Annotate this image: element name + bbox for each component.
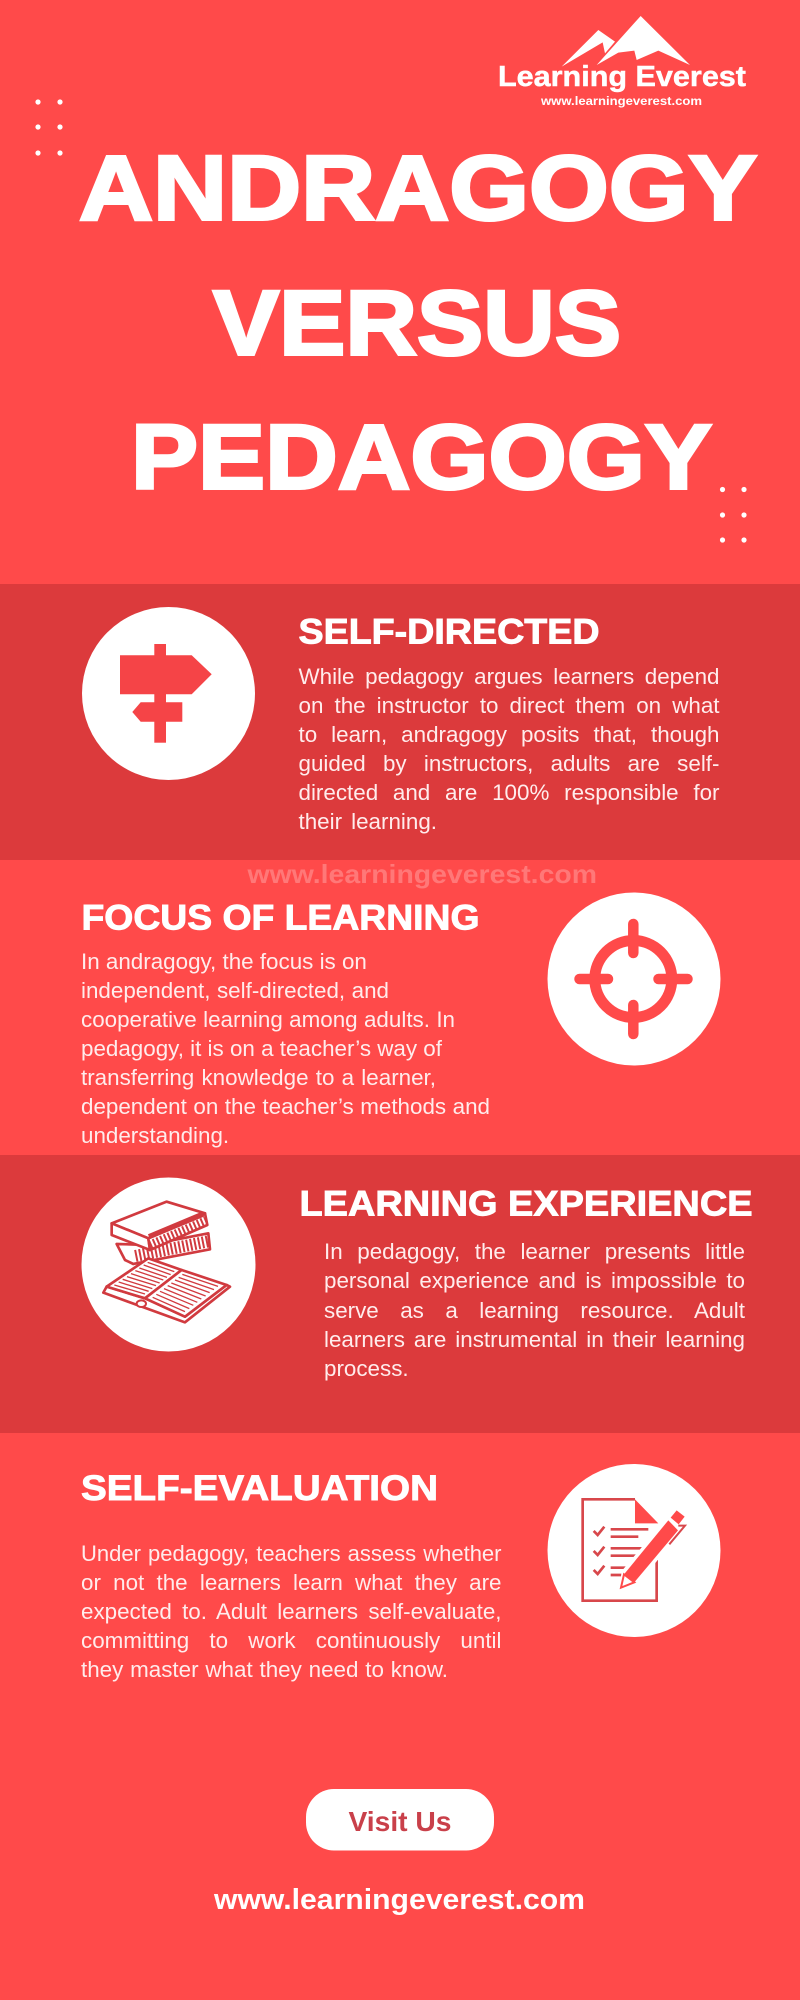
heading: self-directed: SELF-DIRECTED <box>298 612 600 652</box>
heading: focus of learning: FOCUS OF LEARNING <box>82 898 480 938</box>
text: self-directed body: While pedagogy argues learners depend <box>298 664 720 689</box>
button: visit us <box>306 1789 494 1850</box>
text: self-evaluation body: they master what they need to know. <box>81 1657 448 1682</box>
text: focus of learning body: dependent on the teacher’s methods and <box>81 1094 490 1119</box>
text: focus of learning body: pedagogy, it is on a teacher’s way of <box>81 1036 442 1061</box>
text: focus of learning body: cooperative learning among adults. In <box>81 1007 455 1032</box>
text: self-directed body: their learning. <box>298 809 437 834</box>
icon: signpost in white circle <box>82 607 255 780</box>
title: VERSUS <box>213 272 621 374</box>
text: learning experience body: In pedagogy, the learner presents little <box>324 1239 745 1264</box>
text: self-directed body: guided by instructors, adults are self- <box>298 751 720 776</box>
text: self-evaluation body: Under pedagogy, teachers assess whether <box>81 1541 502 1566</box>
upper closed book <box>112 1202 207 1250</box>
text: learning experience body: process. <box>324 1356 409 1381</box>
dots: top left <box>35 99 63 156</box>
heading: self-evaluation: SELF-EVALUATION <box>81 1469 438 1508</box>
title: PEDAGOGY <box>131 406 712 508</box>
title <box>79 138 757 508</box>
text: focus of learning body: transferring knowledge to a learner, <box>81 1065 436 1090</box>
text: self-directed body: directed and are 100% responsible for <box>298 780 720 805</box>
panel: self-evaluation <box>81 1464 720 1682</box>
header: logo, dots and title <box>35 16 758 543</box>
text: self-evaluation body <box>81 1541 502 1682</box>
text: self-evaluation body: expected to. Adult learners self-evaluate, <box>81 1599 502 1624</box>
dots: bottom right <box>720 487 747 543</box>
text: self-directed body <box>298 664 720 834</box>
icon: target in white circle <box>548 892 720 1066</box>
text: focus of learning body <box>81 949 490 1148</box>
text: focus of learning body: understanding. <box>81 1123 229 1148</box>
lower closed book <box>117 1233 210 1264</box>
footer: button and website <box>213 1789 585 1916</box>
text: focus of learning body: independent, self-directed, and <box>81 978 389 1003</box>
button: visit us: Visit Us <box>348 1806 452 1837</box>
text: self-directed body: to learn, andragogy posits that, though <box>298 722 720 747</box>
panel: learning experience <box>0 1155 800 1433</box>
panel: focus of learning <box>81 859 720 1148</box>
logo: Learning Everest <box>498 16 746 108</box>
open book <box>103 1258 230 1322</box>
text: learning experience body <box>324 1239 745 1381</box>
text: learning experience body: learners are instrumental in their learning <box>324 1327 745 1352</box>
text: self-directed body: on the instructor to direct them on what <box>298 693 720 718</box>
text: learning experience body: personal experience and is impossible to <box>324 1268 745 1293</box>
website url: www.learningeverest.com <box>213 1884 585 1916</box>
watermark url: www.learningeverest.com <box>246 859 597 889</box>
icon: mountain peaks <box>562 16 690 67</box>
logo: Learning Everest: www.learningeverest.com <box>540 94 702 108</box>
text: focus of learning body: In andragogy, the focus is on <box>81 949 367 974</box>
logo: Learning Everest: Learning Everest <box>498 61 746 93</box>
page lines <box>114 1262 218 1312</box>
panel: self-directed <box>0 584 800 860</box>
text: self-evaluation body: committing to work continuously until <box>81 1628 502 1653</box>
icon: books in white circle <box>82 1178 256 1352</box>
text: self-evaluation body: or not the learners learn what they are <box>81 1570 502 1595</box>
title: ANDRAGOGY <box>79 138 757 240</box>
text: learning experience body: serve as a learning resource. Adult <box>324 1298 745 1323</box>
icon: checklist and pen in white circle <box>548 1464 720 1637</box>
heading: learning experience: LEARNING EXPERIENCE <box>300 1184 752 1224</box>
